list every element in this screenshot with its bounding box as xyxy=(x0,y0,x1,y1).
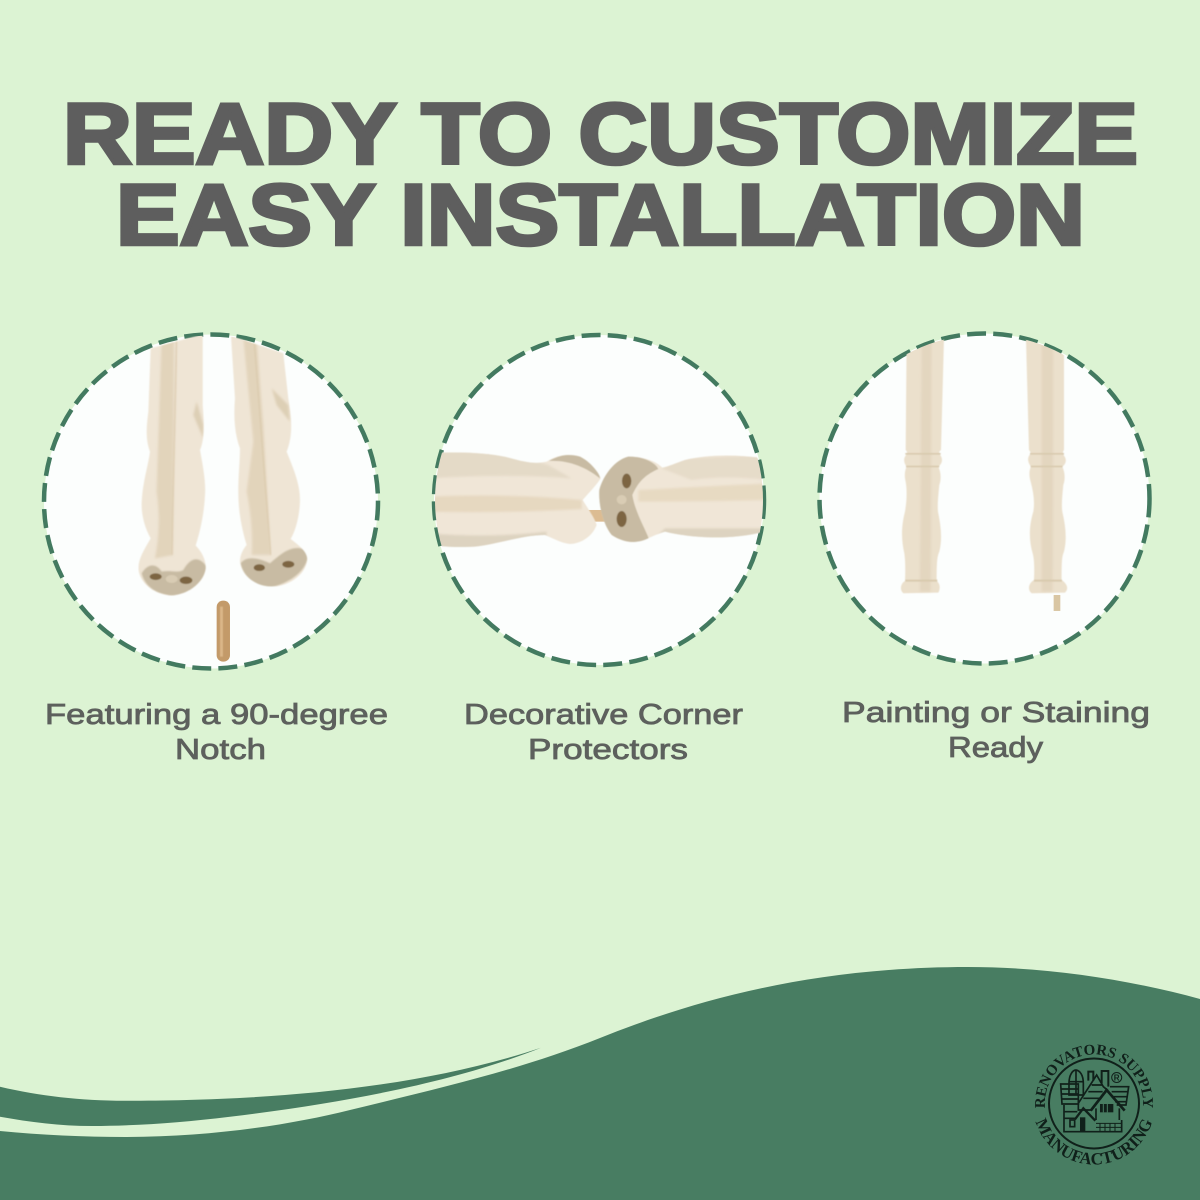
logo: house xyxy=(1061,1070,1129,1132)
caption: protectors: Protectors xyxy=(528,734,688,766)
caption: notch: Featuring a 90-degree xyxy=(45,699,388,731)
caption: staining xyxy=(842,697,1150,764)
caption: staining: Ready xyxy=(948,732,1044,764)
logo: Renovators Supply Manufacturing xyxy=(1035,1044,1153,1165)
wave: sliver xyxy=(0,1048,541,1126)
logo: registered mark: R xyxy=(1114,1074,1120,1082)
caption: protectors xyxy=(464,699,743,766)
logo text: top arc: RENOVATORS SUPPLY xyxy=(1035,1044,1153,1108)
photo: notched balusters with dowel xyxy=(130,332,310,662)
caption: notch xyxy=(45,699,388,766)
title: READY TO CUSTOMIZE xyxy=(63,86,1138,182)
title: EASY INSTALLATION xyxy=(116,168,1085,264)
footer wave xyxy=(0,967,1200,1200)
panel: 90-degree notch xyxy=(44,332,378,668)
caption: protectors: Decorative Corner xyxy=(464,699,743,731)
circle frame: staining xyxy=(820,334,1150,664)
panel: painting or staining xyxy=(820,334,1150,664)
title xyxy=(63,86,1138,264)
caption: staining: Painting or Staining xyxy=(842,697,1150,729)
photo: side view balusters xyxy=(901,338,1067,611)
wave: main dark green xyxy=(0,967,1200,1200)
logo text: bottom arc: MANUFACTURING xyxy=(1036,1117,1152,1165)
circle frame: notch xyxy=(44,334,378,668)
panel: corner protectors xyxy=(428,335,768,665)
caption: notch: Notch xyxy=(175,734,266,766)
circle frame: protectors xyxy=(434,335,764,665)
photo: balusters joined end to end xyxy=(435,452,763,548)
